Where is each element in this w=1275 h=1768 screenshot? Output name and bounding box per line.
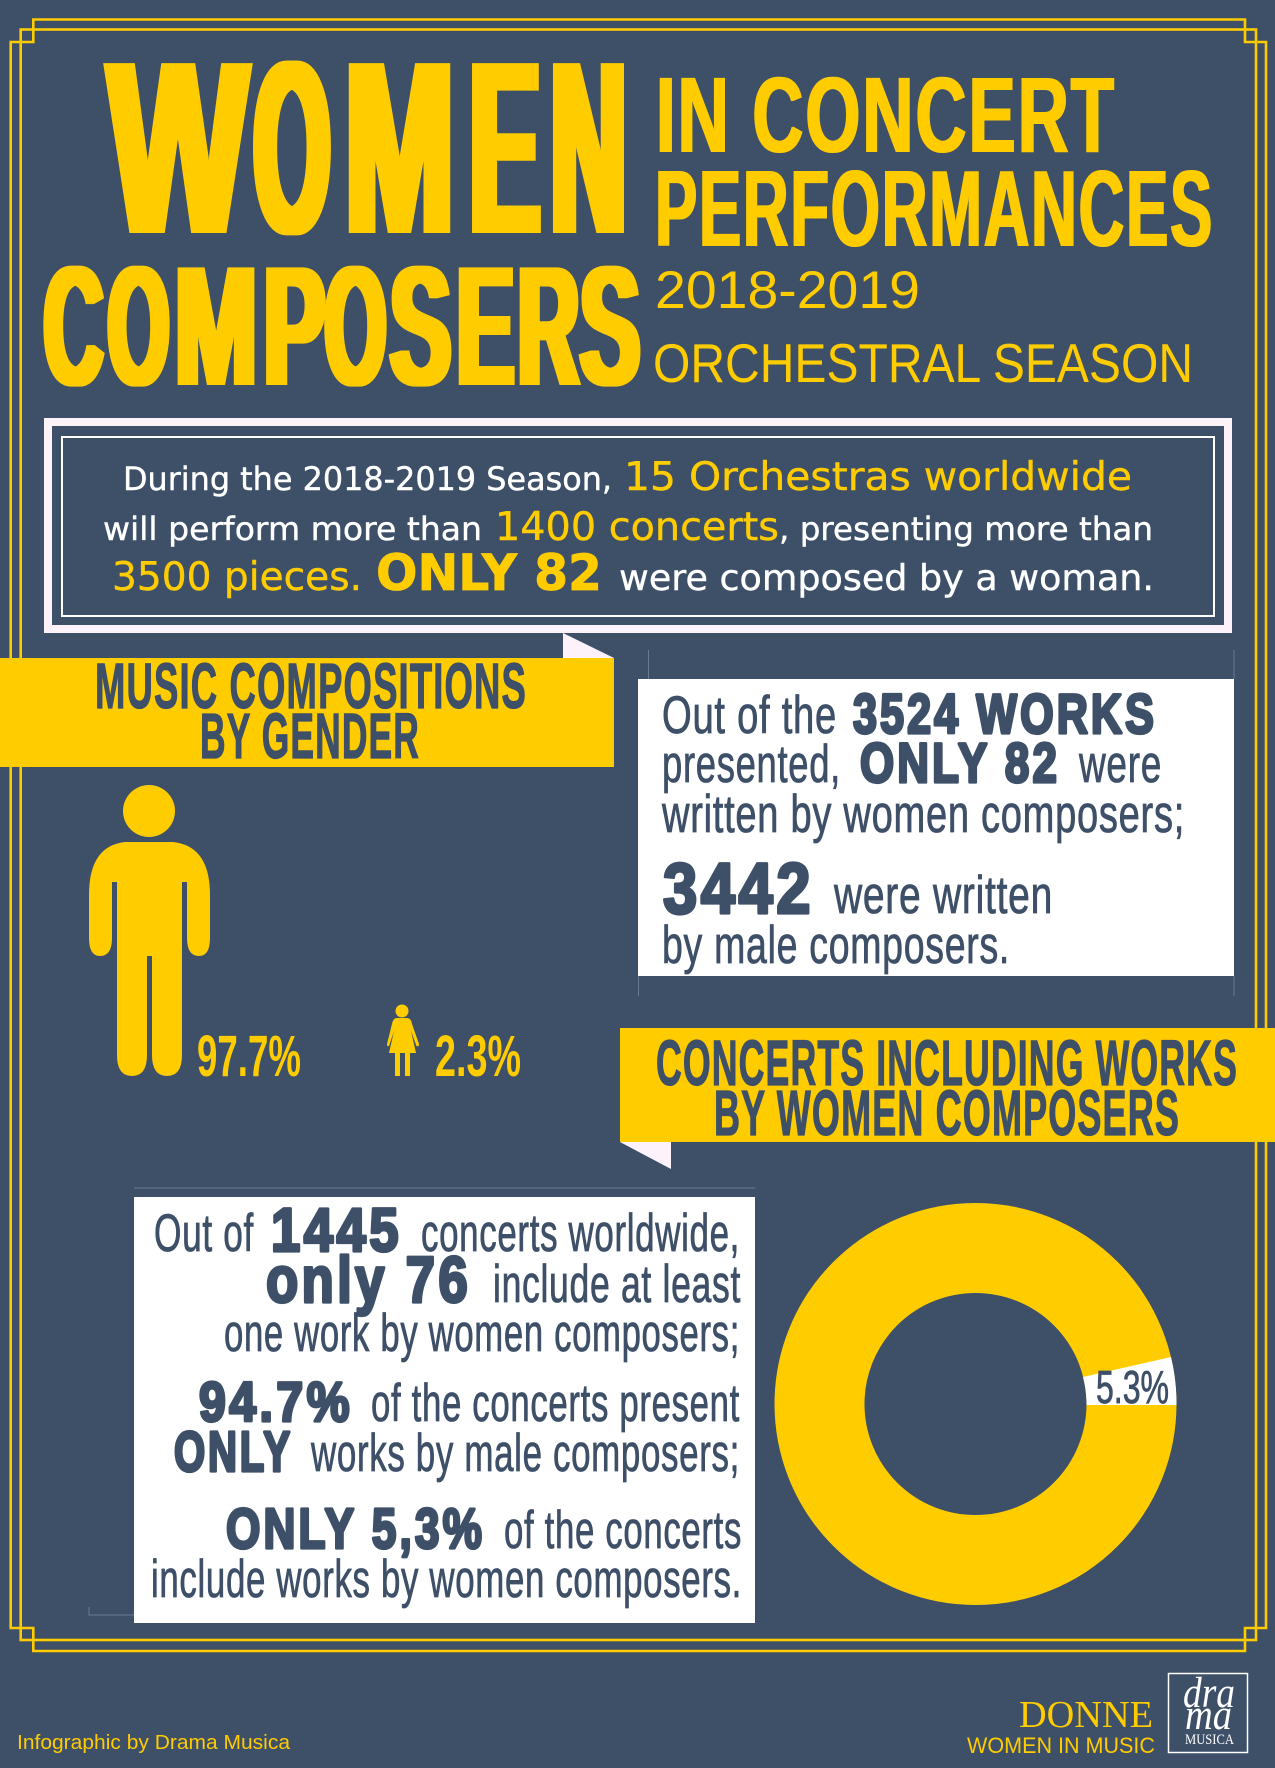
panel: works text box: were bbox=[1078, 735, 1162, 794]
panel: concerts text box: include at least bbox=[493, 1255, 741, 1314]
panel: intro callout: ONLY 82 bbox=[376, 544, 602, 602]
panel: concerts text box: one work by women composers; bbox=[224, 1304, 740, 1363]
title: Women Composers: E bbox=[457, 231, 514, 422]
panel: intro callout bbox=[48, 422, 1228, 658]
icon: male figure bbox=[89, 785, 210, 1076]
subtitle: season: ORCHESTRAL SEASON bbox=[653, 332, 1193, 394]
panel: concerts text box: 1445 bbox=[271, 1196, 402, 1264]
logo: Drama Musica: dra bbox=[1183, 1670, 1235, 1717]
title: Women Composers: O bbox=[254, 10, 330, 286]
title: Women Composers: M bbox=[175, 231, 257, 422]
male percentage: 97.7% bbox=[197, 1024, 301, 1089]
panel: concerts text box: ONLY 5,3% bbox=[226, 1497, 485, 1561]
panel: concerts text box: concerts worldwide, bbox=[421, 1204, 740, 1263]
panel: works text box: were written bbox=[833, 866, 1053, 925]
panel: intro callout: 15 Orchestras worldwide bbox=[624, 455, 1132, 500]
logo: Drama Musica bbox=[1168, 1670, 1248, 1752]
panel: intro callout: During the 2018-2019 Season, bbox=[123, 460, 612, 498]
title: Women Composers: P bbox=[264, 231, 325, 422]
panel: works text box bbox=[638, 650, 1234, 996]
text: N bbox=[551, 10, 626, 286]
panel: concerts text box: ONLY bbox=[174, 1420, 293, 1484]
credit line: Infographic by Drama Musica bbox=[17, 1732, 291, 1754]
panel: intro callout: , presenting more than bbox=[779, 510, 1153, 548]
panel: concerts text box: works by male composers; bbox=[310, 1424, 740, 1483]
panel: concerts text box: of the concerts bbox=[504, 1501, 742, 1560]
title: Women Composers: O bbox=[108, 231, 169, 422]
logo: Drama Musica: MUSICA bbox=[1185, 1732, 1234, 1748]
chart: donut of concerts including women composers bbox=[820, 1248, 1177, 1560]
title: Women Composers: O bbox=[325, 231, 386, 422]
subtitle: season bbox=[653, 261, 1193, 394]
panel: concerts text box: only 76 bbox=[266, 1243, 471, 1316]
panel: works text box: Out of the bbox=[662, 686, 837, 745]
subtitle: in concert performances bbox=[655, 54, 1214, 270]
title: Women Composers bbox=[44, 10, 640, 422]
panel: intro callout: 1400 concerts bbox=[495, 505, 779, 550]
brand: Donne Women in Music: DONNE bbox=[1019, 1694, 1153, 1736]
panel: intro callout: were composed by a woman. bbox=[619, 558, 1154, 599]
title: Women Composers: E bbox=[470, 10, 540, 286]
panel: works text box: by male composers. bbox=[662, 916, 1010, 975]
panel: intro callout: will perform more than bbox=[103, 510, 482, 548]
subtitle: season: 2018-2019 bbox=[655, 261, 920, 320]
title: Women Composers: S bbox=[390, 231, 451, 422]
heading ribbon: concerts including works by women composers bbox=[620, 1027, 1275, 1169]
title: Women Composers: C bbox=[44, 231, 103, 422]
panel: works text box: 3442 bbox=[663, 850, 814, 929]
panel: works text box: 3524 WORKS bbox=[853, 682, 1157, 745]
panel: concerts text box: include works by women composers. bbox=[151, 1550, 742, 1609]
brand: Donne Women in Music: WOMEN IN MUSIC bbox=[967, 1733, 1155, 1758]
brand: Donne Women in Music bbox=[967, 1694, 1155, 1758]
title: Women Composers: M bbox=[345, 10, 454, 286]
chart: donut of concerts including women composers: 5.3% bbox=[1096, 1361, 1169, 1413]
logo: Drama Musica: ma bbox=[1185, 1692, 1232, 1739]
title: Women Composers: R bbox=[518, 231, 579, 422]
title: Women Composers: W bbox=[108, 10, 248, 286]
icon: female figure bbox=[387, 1004, 419, 1076]
panel: concerts text box: Out of bbox=[154, 1204, 254, 1263]
female percentage: 2.3% bbox=[435, 1024, 521, 1089]
panel: concerts text box bbox=[89, 1188, 755, 1623]
title: Women Composers: S bbox=[580, 231, 640, 422]
heading ribbon: music compositions by gender: MUSIC COMPOSITIONS bbox=[95, 650, 527, 722]
heading ribbon: music compositions by gender: BY GENDER bbox=[200, 700, 420, 772]
panel: concerts text box: 94.7% bbox=[199, 1370, 353, 1433]
panel: works text box: ONLY 82 bbox=[860, 731, 1060, 794]
panel: works text box: presented, bbox=[662, 735, 841, 794]
panel: intro callout: 3500 pieces. bbox=[112, 555, 362, 600]
panel: concerts text box: of the concerts present bbox=[371, 1374, 740, 1433]
heading ribbon: music compositions by gender bbox=[0, 650, 614, 772]
